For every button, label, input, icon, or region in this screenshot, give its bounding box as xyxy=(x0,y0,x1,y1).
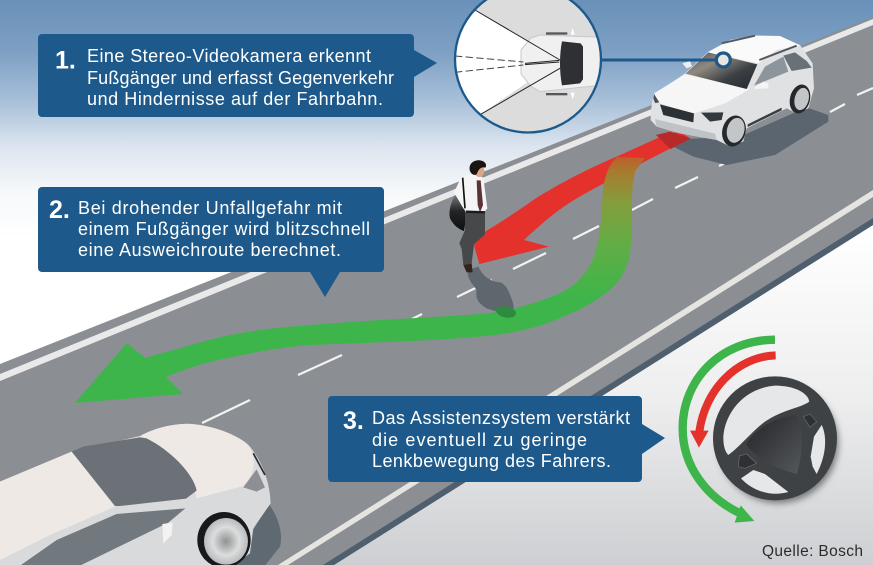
camera field of view xyxy=(456,11,528,114)
roof xyxy=(0,452,115,560)
windshield xyxy=(686,52,757,89)
callout 3 text: Das Assistenzsystem verstärkt xyxy=(372,408,630,428)
mirror xyxy=(162,523,173,543)
side sill xyxy=(748,108,782,127)
trousers xyxy=(459,212,485,265)
callout 2 text: einem Fußgänger wird blitzschnell xyxy=(78,219,370,239)
callout 2 box xyxy=(38,187,384,297)
bag strap xyxy=(463,178,465,208)
callout 2 text: eine Ausweichroute berechnet. xyxy=(78,240,341,260)
steering wheel diagram xyxy=(683,340,838,523)
wheel openings xyxy=(723,386,809,455)
head xyxy=(470,160,486,177)
mirrors xyxy=(754,82,768,89)
red arrow dark start xyxy=(656,132,691,149)
callout 2 text: Bei drohender Unfallgefahr mit xyxy=(78,198,342,218)
number 2: 2. xyxy=(49,196,70,224)
lens background xyxy=(455,0,601,132)
rear wheel xyxy=(787,82,813,116)
headlights xyxy=(701,112,723,122)
lens ring xyxy=(455,0,601,132)
number 3: 3. xyxy=(343,407,364,435)
camera detail lens xyxy=(440,0,730,132)
red arrow: collision course xyxy=(474,132,691,264)
shadow on green arrow xyxy=(495,305,517,319)
car body xyxy=(651,36,814,146)
callout 1 text: Fußgänger und erfasst Gegenverkehr xyxy=(87,68,394,88)
roof rails xyxy=(722,36,797,60)
upper edge line xyxy=(0,19,873,381)
shadow of pedestrian xyxy=(468,267,514,313)
green arrow: evasive route xyxy=(75,157,645,403)
callout 1 text: Eine Stereo-Videokamera erkennt xyxy=(87,46,371,66)
source credit: Quelle: Bosch xyxy=(762,543,863,560)
callout 2 xyxy=(38,187,384,297)
shoes xyxy=(463,263,473,272)
road edge xyxy=(323,218,873,565)
shirt xyxy=(454,173,487,212)
car in foreground (bottom left) xyxy=(0,424,281,565)
shadow xyxy=(233,503,281,565)
callout 3 xyxy=(328,396,665,482)
trunk xyxy=(140,424,254,498)
rear window xyxy=(72,437,197,506)
number 1: 1. xyxy=(55,46,76,74)
sensing lines xyxy=(475,10,560,60)
windshield top view xyxy=(560,41,583,85)
callout 1 box xyxy=(38,34,437,117)
wheel shadow xyxy=(718,383,838,503)
green steering arrow xyxy=(683,340,775,523)
red steering arrow xyxy=(690,355,776,448)
body xyxy=(0,424,271,565)
wheel xyxy=(197,512,251,565)
lens contents xyxy=(456,10,600,114)
pedestrian xyxy=(449,160,487,272)
callout 1 xyxy=(38,34,437,117)
belt xyxy=(466,208,485,216)
car shadow xyxy=(660,107,828,165)
callout 3 text: die eventuell zu geringe xyxy=(372,430,587,450)
taillight xyxy=(243,469,265,492)
callout 3 text: Lenkbewegung des Fahrers. xyxy=(372,451,611,471)
bag xyxy=(449,195,466,231)
car with camera (top right) xyxy=(651,36,814,149)
wheel buttons xyxy=(803,414,817,427)
steering wheel xyxy=(713,376,837,500)
car from above xyxy=(521,35,603,92)
lower edge line xyxy=(278,190,873,565)
camera marker xyxy=(716,53,730,67)
callout 1 text: und Hindernisse auf der Fahrbahn. xyxy=(87,89,383,109)
front wheel xyxy=(719,113,749,149)
wheel hub xyxy=(746,415,802,474)
connector line xyxy=(602,55,717,64)
callout 3 box xyxy=(328,396,665,482)
tie xyxy=(477,180,483,212)
hood xyxy=(654,74,750,114)
grille xyxy=(660,104,694,122)
red arrow body xyxy=(474,132,690,264)
roof xyxy=(708,36,800,63)
side windows xyxy=(754,57,788,86)
bumper xyxy=(655,119,717,140)
mirrors top view xyxy=(546,32,567,35)
lane dashes xyxy=(202,88,873,423)
background ground xyxy=(0,190,873,565)
side window xyxy=(20,508,185,565)
